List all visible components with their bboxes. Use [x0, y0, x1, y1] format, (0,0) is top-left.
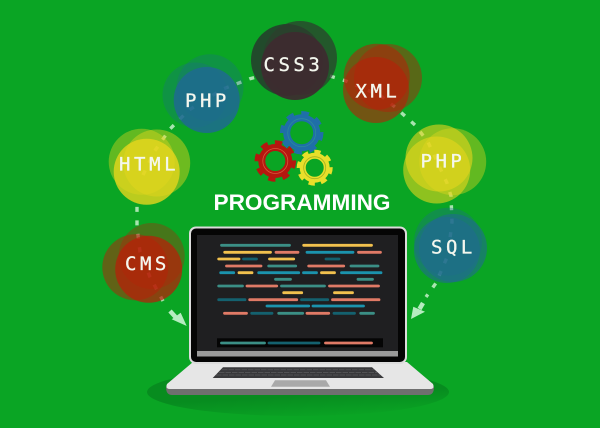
bubble: PHP yellow: [403, 124, 486, 204]
laptop shadow: [147, 368, 449, 416]
label: SQL: SQL: [431, 236, 476, 258]
gear: yellow: [299, 152, 330, 183]
label: CSS3: CSS3: [264, 54, 323, 76]
gear: red: [257, 143, 293, 179]
keyboard: [213, 367, 384, 378]
screen bottom bar: [197, 351, 398, 356]
bubble: PHP blue: [162, 54, 244, 133]
screen: [197, 235, 398, 351]
label: PHP: PHP: [185, 90, 230, 112]
label: CMS: CMS: [125, 253, 170, 275]
laptop screen frame: [190, 228, 406, 363]
arrow: to laptop left: [170, 311, 187, 326]
dashed connector: CMS to PHP: [137, 74, 268, 301]
bubble: CMS: [102, 223, 185, 303]
label: HTML: HTML: [119, 154, 179, 176]
code lines: [219, 245, 381, 313]
bubble: HTML: [109, 129, 190, 205]
bubble: SQL: [414, 208, 487, 283]
label: PHP: PHP: [420, 150, 465, 172]
laptop base: [166, 362, 434, 395]
arrow: to laptop right: [411, 303, 425, 319]
laptop: [166, 228, 434, 395]
title: PROGRAMMING: [214, 190, 390, 215]
dashed connector: CSS3 to SQL: [330, 76, 452, 297]
trackpad: [271, 380, 330, 387]
bubble: CSS3: [251, 21, 337, 100]
label: XML: XML: [356, 81, 400, 103]
gear: blue: [283, 114, 321, 152]
bubble: XML: [343, 44, 422, 123]
status bar: [217, 338, 383, 347]
